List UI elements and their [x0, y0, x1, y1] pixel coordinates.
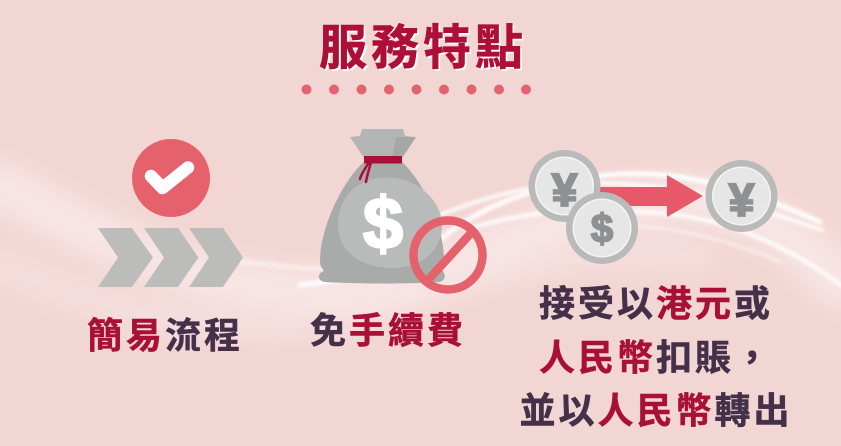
icon: dollar coin [566, 192, 638, 264]
icon: yuan coin right: ¥ [729, 174, 755, 226]
text block: currency description [519, 283, 793, 431]
label: simple process: 簡易流程 [87, 315, 243, 356]
icon: dollar coin: $ [591, 207, 613, 251]
text block: currency description: 接受以港元或 [539, 283, 773, 324]
icon: prohibition sign [414, 220, 482, 290]
icon: check mark circle [132, 139, 210, 217]
icon: yuan coin right [706, 160, 778, 232]
icon: yuan coin left [528, 150, 600, 222]
label: no fee: 免手續費 [310, 310, 466, 351]
background light streaks [0, 174, 841, 323]
icon: three chevrons [98, 228, 243, 287]
dollar sign on bag: $ [363, 184, 403, 264]
icon: yuan coin left: ¥ [552, 164, 578, 216]
arrow: currency conversion [596, 175, 703, 217]
icon: money bag with prohibition sign [319, 129, 482, 290]
text block: currency description: 並以人民幣轉出 [519, 390, 793, 431]
title dots [302, 84, 531, 94]
text block: currency description: 人民幣扣賬， [539, 336, 773, 378]
title: 服務特點 [319, 22, 527, 75]
